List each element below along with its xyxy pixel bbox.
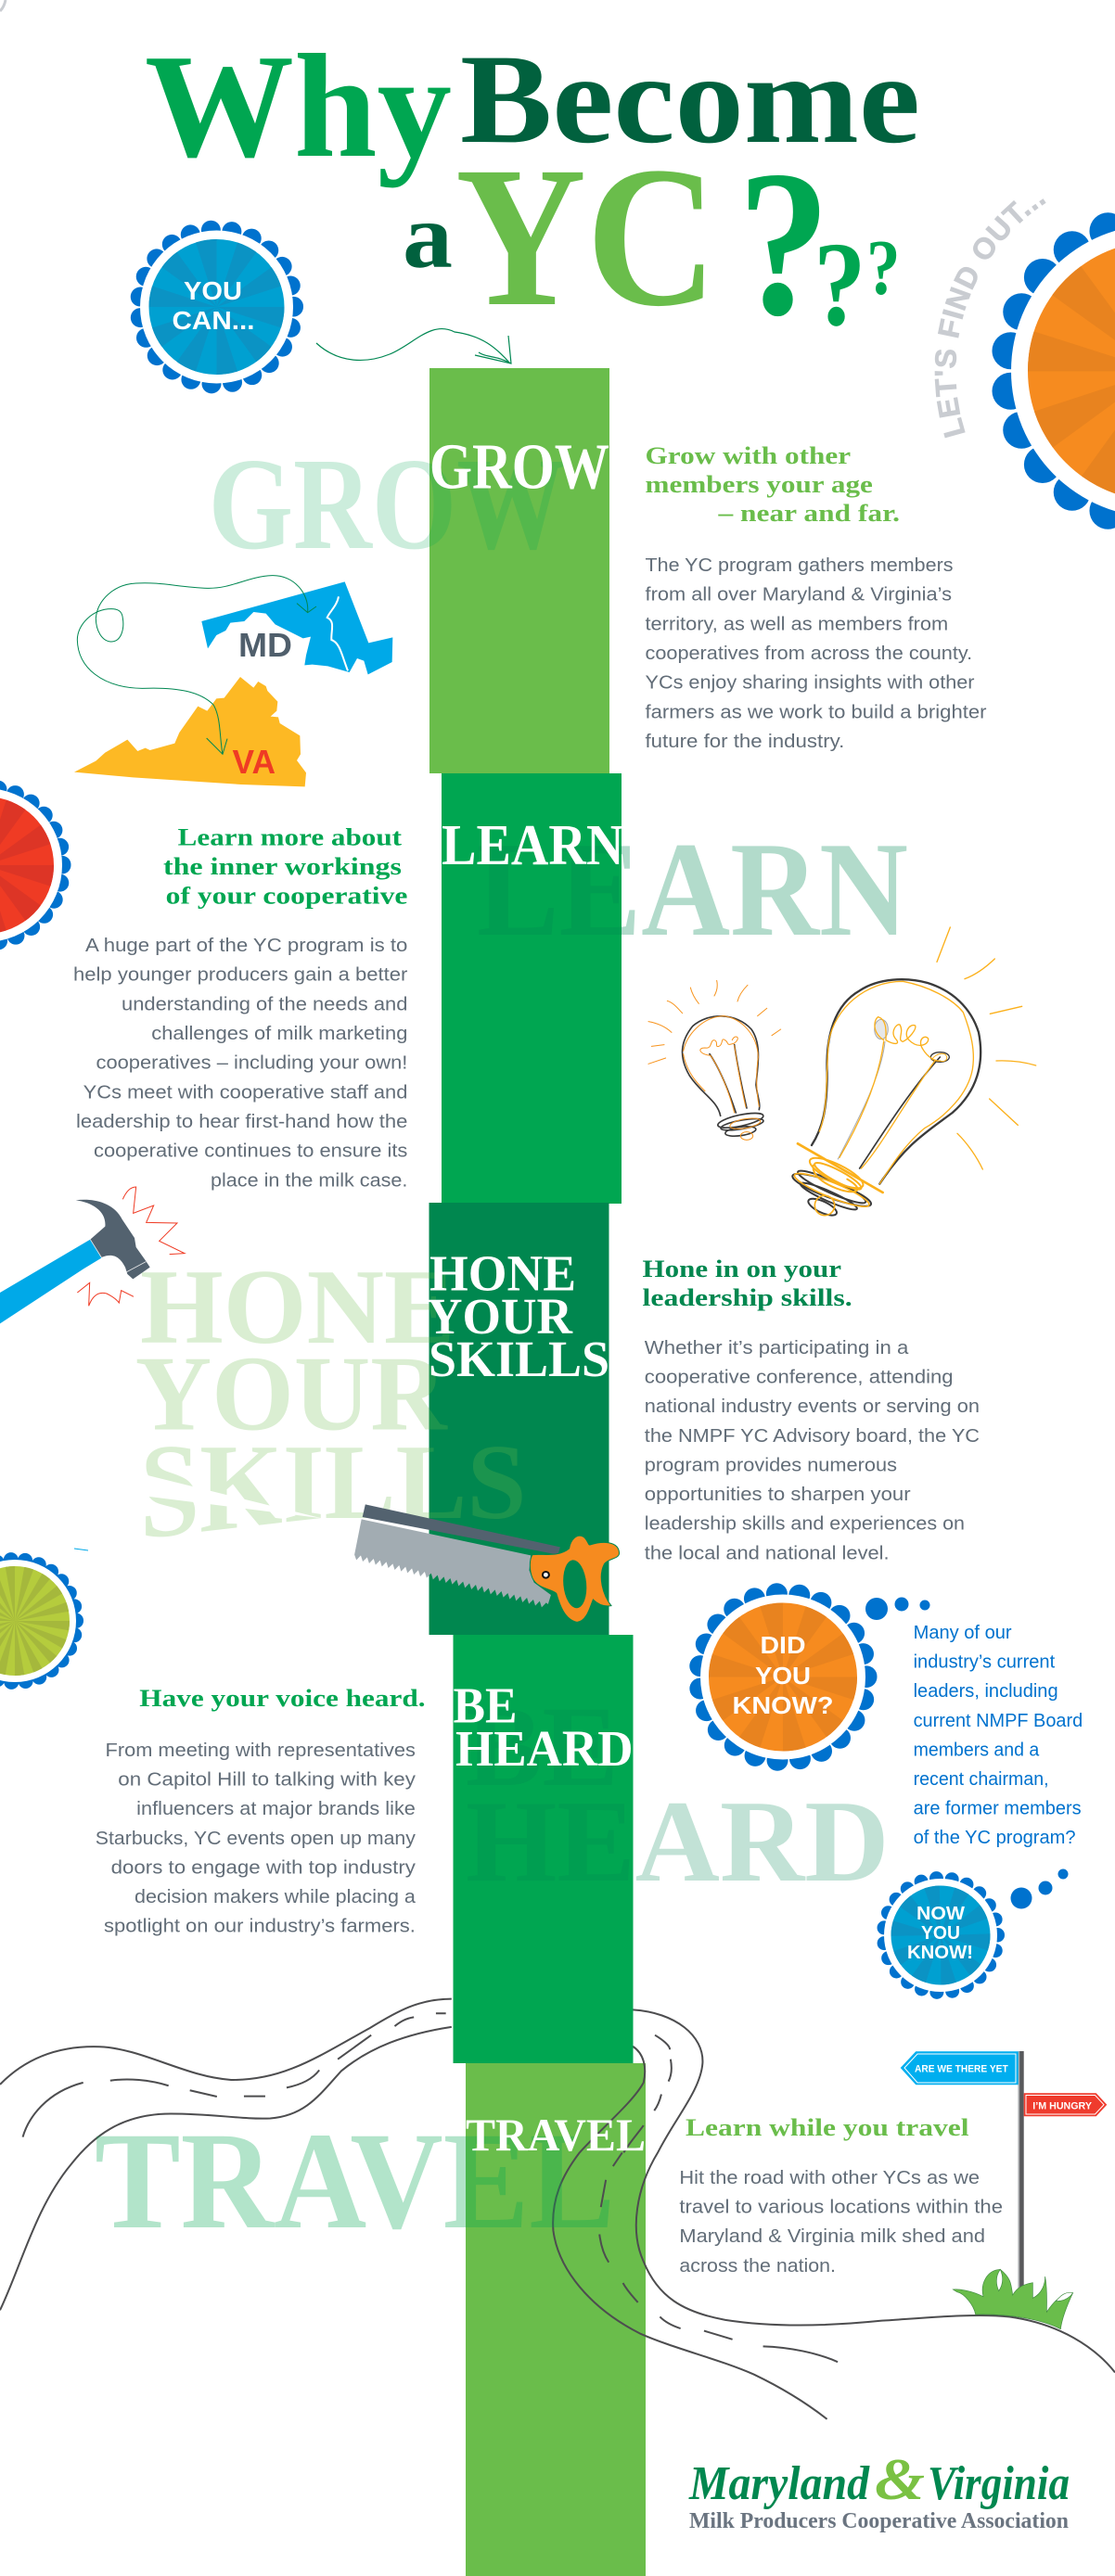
title: ? xyxy=(814,218,866,351)
text block: did you know fact: Many of our xyxy=(914,1623,1012,1643)
badge: red sunburst xyxy=(0,788,62,942)
title: Become xyxy=(460,28,920,170)
text block: did you know fact: are former members xyxy=(914,1799,1082,1819)
badge: did you know xyxy=(699,1593,866,1760)
title xyxy=(145,23,920,359)
badge: now you know xyxy=(883,1879,998,1992)
heading: hone: leadership skills. xyxy=(642,1284,852,1311)
heading: learn: Learn more about xyxy=(178,823,402,850)
text block: learn: cooperative continues to ensure its xyxy=(94,1141,407,1162)
bar title: be heard xyxy=(453,1677,633,1777)
arrow: you can to grow xyxy=(316,329,511,363)
text block: learn: challenges of milk marketing xyxy=(151,1023,407,1044)
badge: lime sunburst xyxy=(0,1549,88,1682)
bar title: hone your skills: SKILLS xyxy=(429,1331,609,1387)
text block: travel: across the nation. xyxy=(679,2255,836,2276)
text block: did you know fact: recent chairman, xyxy=(914,1769,1049,1790)
logo: maryland and virginia: Virginia xyxy=(928,2457,1070,2510)
panel: travel bar xyxy=(466,2063,646,2576)
map: maryland and virginia: MD xyxy=(238,626,292,664)
text block: learn: YCs meet with cooperative staff and xyxy=(83,1081,407,1103)
text block: hone: cooperative conference, attending xyxy=(645,1367,954,1388)
heading: hone xyxy=(642,1256,852,1311)
panel: hone your skills bar xyxy=(429,1203,609,1635)
text block: grow: from all over Maryland & Virginia’s xyxy=(646,584,952,606)
text block: be heard: on Capitol Hill to talking with key xyxy=(118,1769,417,1791)
text block: grow: YCs enjoy sharing insights with other xyxy=(646,672,975,694)
ghost words: be heard: BE xyxy=(466,1683,619,1810)
heading: grow: members your age xyxy=(646,471,873,498)
heading: learn xyxy=(163,823,407,909)
badge: you can xyxy=(139,230,293,384)
panel: learn bar xyxy=(442,773,622,1204)
text block: learn: help younger producers gain a better xyxy=(73,964,408,986)
title: YC xyxy=(455,125,717,348)
badge: now you know: KNOW! xyxy=(907,1943,973,1963)
badge: now you know: YOU xyxy=(921,1923,960,1944)
heading: learn: of your cooperative xyxy=(166,883,407,909)
heading: travel: Learn while you travel xyxy=(686,2114,968,2141)
map: maryland and virginia: VA xyxy=(232,743,276,781)
text block: travel xyxy=(679,2167,1003,2276)
bar title: learn: LEARN xyxy=(442,814,623,877)
heading: be heard: Have your voice heard. xyxy=(139,1685,426,1712)
text block: did you know fact: leaders, including xyxy=(914,1681,1058,1702)
text block: be heard: decision makers while placing a xyxy=(135,1886,417,1907)
heading: learn: the inner workings xyxy=(163,853,402,880)
text block: be heard: influencers at major brands like xyxy=(136,1798,416,1819)
logo: maryland and virginia xyxy=(688,2446,1070,2533)
text block: be heard xyxy=(96,1740,417,1936)
text block: be heard: spotlight on our industry’s farmers. xyxy=(104,1915,416,1936)
ghost words: be heard: HEARD xyxy=(466,1778,890,1906)
logo: maryland and virginia: Maryland xyxy=(688,2457,870,2510)
text block: travel: travel to various locations within the xyxy=(679,2197,1003,2218)
badge: you can: CAN... xyxy=(173,306,254,335)
badge: let's find out orange sunburst xyxy=(1009,223,1115,519)
ghost word: travel: TRAVEL xyxy=(95,2104,615,2258)
bar title: be heard: BE xyxy=(453,1677,518,1734)
ghost word: skills with warped cut: SKILLS xyxy=(140,1423,527,1542)
text block: hone: program provides numerous xyxy=(645,1454,897,1475)
text block: did you know fact: industry’s current xyxy=(914,1652,1056,1673)
text block: grow: future for the industry. xyxy=(646,731,844,752)
bar title: hone your skills: YOUR xyxy=(427,1288,573,1345)
ghost words: hone your: HONE xyxy=(140,1248,455,1367)
text block: hone: leadership skills and experiences on xyxy=(645,1513,965,1535)
text block: learn: place in the milk case. xyxy=(211,1169,407,1191)
bar title: hone your skills xyxy=(427,1245,609,1387)
text block: be heard: doors to engage with top industry xyxy=(111,1856,417,1878)
text block: did you know fact: of the YC program? xyxy=(914,1828,1076,1848)
text block: hone: the local and national level. xyxy=(645,1542,890,1563)
title: Why xyxy=(145,23,452,188)
ghost words: hone your: YOUR xyxy=(135,1335,448,1454)
icon: saw xyxy=(354,1504,620,1622)
title: a xyxy=(403,185,453,287)
badge: now you know: NOW xyxy=(916,1904,965,1924)
badge: did you know: DID xyxy=(761,1631,805,1659)
title: ? xyxy=(737,127,830,359)
panel: be heard bar xyxy=(453,1635,633,2063)
map: maryland and virginia xyxy=(74,576,392,786)
badge: did you know: KNOW? xyxy=(733,1691,833,1719)
logo: maryland and virginia: & xyxy=(875,2446,925,2512)
icon: signpost xyxy=(901,2051,1107,2289)
thought bubbles: did you know xyxy=(865,1597,929,1620)
ghost word: skills with warped cut: SKILLS xyxy=(140,1399,526,1562)
text block: be heard: From meeting with representatives xyxy=(106,1740,416,1761)
text block: did you know fact: members and a xyxy=(914,1740,1040,1760)
text block: travel: Hit the road with other YCs as we xyxy=(679,2167,980,2188)
ghost word: grow: GROW xyxy=(209,430,566,577)
text block: learn: understanding of the needs and xyxy=(122,993,407,1014)
icon: grass xyxy=(953,2269,1073,2329)
ghost words: hone your xyxy=(135,1248,455,1454)
ghost words: be heard xyxy=(466,1683,890,1906)
text block: hone xyxy=(645,1337,980,1563)
text block: grow: territory, as well as members from xyxy=(646,613,948,634)
icon: signpost: ARE WE THERE YET xyxy=(915,2064,1008,2075)
text block: did you know fact: current NMPF Board xyxy=(914,1711,1083,1731)
text block: hone: national industry events or serving on xyxy=(645,1396,980,1417)
bar title: hone your skills: HONE xyxy=(429,1245,576,1302)
text block: hone: opportunities to sharpen your xyxy=(645,1484,911,1505)
text block: grow: farmers as we work to build a brighter xyxy=(646,701,987,722)
curved text: let's find out: LET'S FIND OUT... xyxy=(935,198,1046,438)
badge: did you know: YOU xyxy=(755,1662,811,1690)
road illustration xyxy=(0,1999,1115,2419)
text block: travel: Maryland & Virginia milk shed and xyxy=(679,2225,985,2247)
heading: grow: – near and far. xyxy=(717,500,900,527)
text block: hone: the NMPF YC Advisory board, the YC xyxy=(645,1425,980,1447)
text block: learn: cooperatives – including your own! xyxy=(96,1052,407,1074)
bar title: grow: GROW xyxy=(429,432,609,503)
ghost word: learn: LEARN xyxy=(477,814,908,964)
text block: learn: A huge part of the YC program is to xyxy=(85,935,407,956)
icon: hammer xyxy=(0,1187,185,1323)
panel: grow bar xyxy=(429,368,609,773)
text block: grow xyxy=(646,555,987,752)
icon: signpost: I’M HUNGRY xyxy=(1032,2100,1093,2111)
heading: grow: Grow with other xyxy=(646,442,851,469)
logo: maryland and virginia: Milk Producers Cooperative Association xyxy=(689,2509,1069,2533)
text block: grow: The YC program gathers members xyxy=(646,555,954,576)
text block: did you know fact xyxy=(914,1623,1083,1848)
bar title: be heard: HEARD xyxy=(455,1720,633,1777)
title: ? xyxy=(866,224,900,312)
text block: learn xyxy=(73,935,408,1191)
text block: grow: cooperatives from across the county. xyxy=(646,643,972,664)
thought bubbles: now you know xyxy=(1011,1869,1069,1908)
text block: hone: Whether it’s participating in a xyxy=(645,1337,909,1358)
heading: hone: Hone in on your xyxy=(642,1256,841,1282)
text block: be heard: Starbucks, YC events open up many xyxy=(96,1828,417,1849)
icon: light bulbs xyxy=(648,927,1036,1218)
text block: learn: leadership to hear first-hand how the xyxy=(76,1111,407,1132)
bar title: travel: TRAVEL xyxy=(466,2109,646,2161)
badge: you can: YOU xyxy=(184,276,242,305)
heading: grow xyxy=(646,442,900,527)
